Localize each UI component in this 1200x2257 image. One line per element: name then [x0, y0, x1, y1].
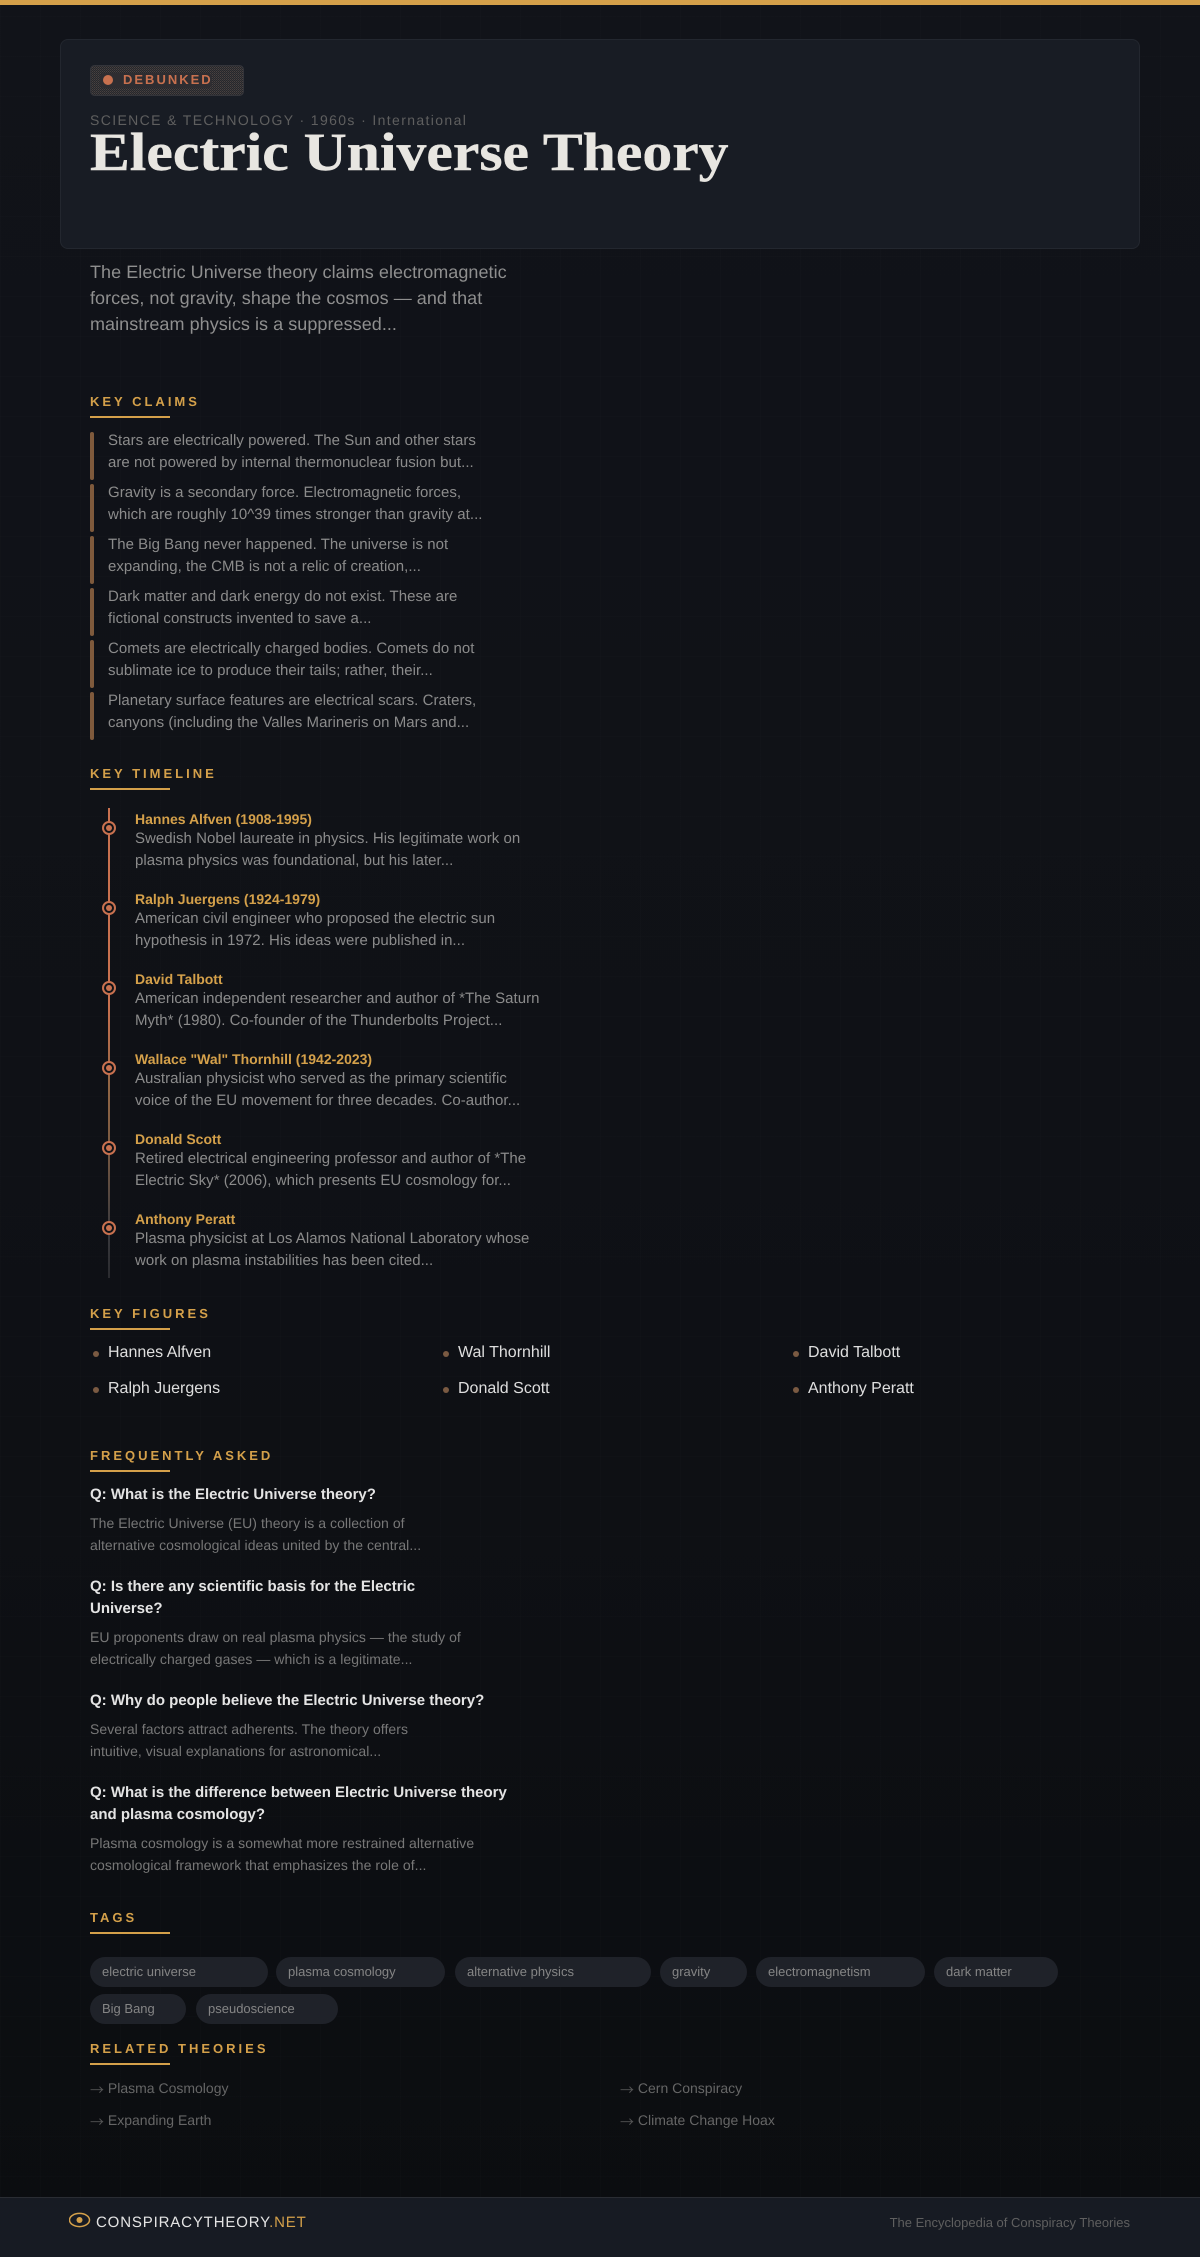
event: Alfven: Hannes Alfven (1908-1995)	[135, 811, 312, 827]
claim 6	[90, 692, 476, 740]
question 4: Q: What is the difference between Electric Universe theory	[90, 1784, 507, 1801]
key figures grid	[93, 1344, 914, 1397]
event: Peratt: Plasma physicist at Los Alamos National Laboratory whose	[135, 1230, 529, 1247]
claim 2: Gravity is a secondary force. Electromagnetic forces,	[108, 484, 461, 501]
tag: gravity	[672, 1964, 710, 1979]
badge: debunked	[90, 65, 244, 96]
event: Thornhill: Wallace "Wal" Thornhill (1942-2023)	[135, 1051, 372, 1067]
event: Alfven	[102, 811, 520, 869]
figure: Anthony Peratt	[808, 1380, 914, 1397]
figure: Ralph Juergens	[108, 1380, 220, 1397]
tag: pseudoscience	[208, 2001, 295, 2016]
tags	[90, 1957, 1058, 2024]
event: Juergens	[102, 891, 495, 949]
answer 3: intuitive, visual explanations for astronomical...	[90, 1743, 381, 1759]
claim 4: fictional constructs invented to save a...	[108, 610, 371, 627]
related link: → Cern Conspiracy	[620, 2080, 742, 2100]
answer 1	[90, 1515, 421, 1553]
claim 2: which are roughly 10^39 times stronger than gravity at...	[108, 506, 483, 523]
tag	[660, 1957, 747, 1987]
event: Talbott: David Talbott	[135, 971, 223, 987]
tagline: The Encyclopedia of Conspiracy Theories	[890, 2215, 1130, 2230]
question 4	[90, 1784, 507, 1823]
event: Alfven: plasma physics was foundational, but his later...	[135, 852, 453, 869]
heading: key claims: KEY CLAIMS	[90, 394, 200, 409]
event: Scott: Retired electrical engineering professor and author of *The	[135, 1150, 526, 1167]
figure: Hannes Alfven	[108, 1344, 211, 1361]
tag: electric universe	[102, 1964, 196, 1979]
title: Electric Universe Theory	[90, 122, 729, 182]
event: Peratt: work on plasma instabilities has been cited...	[135, 1252, 433, 1269]
intro text: forces, not gravity, shape the cosmos — and that	[90, 288, 482, 308]
tag: plasma cosmology	[288, 1964, 396, 1979]
claim 3	[90, 536, 448, 584]
claim 5	[90, 640, 474, 688]
figure: Wal Thornhill	[458, 1344, 550, 1361]
question 2	[90, 1578, 415, 1617]
event: Scott: Donald Scott	[135, 1131, 221, 1147]
heading: key timeline: KEY TIMELINE	[90, 766, 217, 781]
meta line: SCIENCE & TECHNOLOGY · 1960s · International	[90, 112, 467, 128]
event: Juergens: American civil engineer who proposed the electric sun	[135, 910, 495, 927]
claim 2	[90, 484, 483, 532]
event: Scott	[102, 1131, 526, 1189]
logo text: CONSPIRACYTHEORY.NET	[96, 2214, 307, 2231]
tag	[90, 1957, 268, 1987]
claims list	[90, 432, 483, 740]
claim 5: sublimate ice to produce their tails; rather, their...	[108, 662, 433, 679]
badge: debunked: DEBUNKED	[123, 72, 213, 87]
heading: related theories: RELATED THEORIES	[90, 2041, 268, 2056]
event: Alfven: Swedish Nobel laureate in physics. His legitimate work on	[135, 830, 520, 847]
claim 5: Comets are electrically charged bodies. Comets do not	[108, 640, 474, 657]
event: Peratt: Anthony Peratt	[135, 1211, 235, 1227]
related theories list	[90, 2080, 775, 2132]
icon: eye logo	[69, 2212, 91, 2228]
event: Thornhill: Australian physicist who served as the primary scientific	[135, 1070, 507, 1087]
question 4: and plasma cosmology?	[90, 1806, 265, 1823]
event: Scott: Electric Sky* (2006), which presents EU cosmology for...	[135, 1172, 511, 1189]
claim 1: are not powered by internal thermonuclear fusion but...	[108, 454, 474, 471]
answer 2: EU proponents draw on real plasma physics — the study of	[90, 1629, 461, 1645]
intro text	[90, 262, 507, 334]
tag	[756, 1957, 925, 1987]
heading: frequently asked: FREQUENTLY ASKED	[90, 1448, 273, 1463]
intro text: mainstream physics is a suppressed...	[90, 314, 397, 334]
intro text: The Electric Universe theory claims electromagnetic	[90, 262, 507, 282]
claim 1	[90, 432, 476, 480]
tag	[455, 1957, 651, 1987]
top accent bar	[0, 0, 1200, 5]
related link: → Climate Change Hoax	[620, 2112, 775, 2132]
answer 1: The Electric Universe (EU) theory is a collection of	[90, 1515, 405, 1531]
event: Thornhill: voice of the EU movement for three decades. Co-author...	[135, 1092, 520, 1109]
claim 3: expanding, the CMB is not a relic of creation,...	[108, 558, 421, 575]
event: Talbott: American independent researcher and author of *The Saturn	[135, 990, 539, 1007]
answer 2: electrically charged gases — which is a legitimate...	[90, 1651, 412, 1667]
answer 4	[90, 1835, 474, 1873]
tag	[276, 1957, 445, 1987]
tag: electromagnetism	[768, 1964, 871, 1979]
question 1: Q: What is the Electric Universe theory?	[90, 1486, 376, 1503]
related link: → Plasma Cosmology	[90, 2080, 228, 2100]
answer 4: Plasma cosmology is a somewhat more restrained alternative	[90, 1835, 474, 1851]
event: Peratt	[102, 1211, 529, 1269]
tag: Big Bang	[102, 2001, 155, 2016]
question 2: Q: Is there any scientific basis for the Electric	[90, 1578, 415, 1595]
event: Juergens: Ralph Juergens (1924-1979)	[135, 891, 320, 907]
answer 4: cosmological framework that emphasizes the role of...	[90, 1857, 426, 1873]
event: Juergens: hypothesis in 1972. His ideas were published in...	[135, 932, 465, 949]
answer 2	[90, 1629, 461, 1667]
panel: hero header	[60, 39, 1140, 249]
event: Talbott: Myth* (1980). Co-founder of the Thunderbolts Project...	[135, 1012, 502, 1029]
event: Thornhill	[102, 1051, 520, 1109]
answer 3	[90, 1721, 408, 1759]
claim 6: canyons (including the Valles Marineris on Mars and...	[108, 714, 469, 731]
tag	[90, 1994, 186, 2024]
answer 1: alternative cosmological ideas united by the central...	[90, 1537, 421, 1553]
tag: alternative physics	[467, 1964, 574, 1979]
timeline	[102, 808, 539, 1278]
claim 4: Dark matter and dark energy do not exist. These are	[108, 588, 457, 605]
figure: Donald Scott	[458, 1380, 550, 1397]
tag	[934, 1957, 1058, 1987]
claim 4	[90, 588, 457, 636]
answer 3: Several factors attract adherents. The theory offers	[90, 1721, 408, 1737]
heading: key figures: KEY FIGURES	[90, 1306, 211, 1321]
claim 3: The Big Bang never happened. The universe is not	[108, 536, 448, 553]
claim 6: Planetary surface features are electrical scars. Craters,	[108, 692, 476, 709]
footer	[0, 2197, 1200, 2257]
event: Talbott	[102, 971, 539, 1029]
question 3: Q: Why do people believe the Electric Universe theory?	[90, 1692, 484, 1709]
related link: → Expanding Earth	[90, 2112, 211, 2132]
question 2: Universe?	[90, 1600, 163, 1617]
claim 1: Stars are electrically powered. The Sun and other stars	[108, 432, 476, 449]
tag	[196, 1994, 338, 2024]
figure: David Talbott	[808, 1344, 900, 1361]
tag: dark matter	[946, 1964, 1012, 1979]
heading: tags: TAGS	[90, 1910, 137, 1925]
timeline line	[108, 808, 110, 1278]
